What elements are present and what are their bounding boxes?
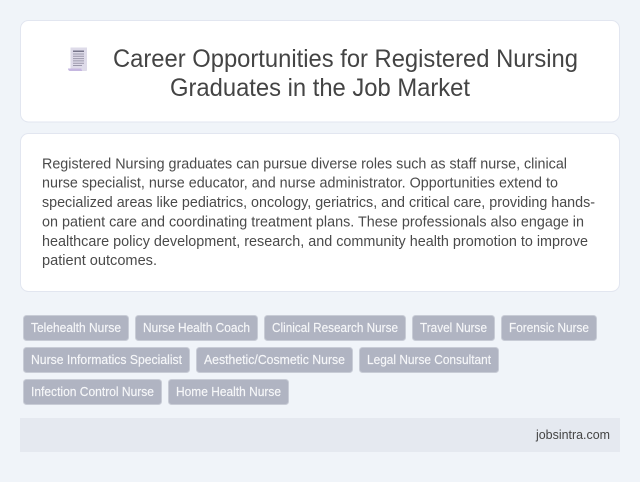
description text: healthcare policy development, research, and community health promotion to improve [42, 233, 588, 250]
tag: Nurse Health Coach: Nurse Health Coach [143, 321, 250, 335]
tag: Home Health Nurse: Home Health Nurse [176, 385, 281, 399]
panel: description [20, 134, 620, 292]
tag: Clinical Research Nurse [264, 316, 406, 340]
description text: specialized areas like pediatrics, oncology, geriatrics, and critical care, providing hands- [42, 194, 595, 211]
tag: Nurse Informatics Specialist [24, 348, 190, 372]
tag: Aesthetic/Cosmetic Nurse [196, 348, 352, 372]
description text: patient outcomes. [42, 252, 157, 269]
tag: Legal Nurse Consultant [360, 348, 498, 372]
tag: Infection Control Nurse: Infection Control Nurse [31, 385, 154, 399]
description text: Registered Nursing graduates can pursue diverse roles such as staff nurse, clinical [42, 156, 567, 172]
title: Graduates in the Job Market [170, 74, 470, 102]
title [113, 45, 578, 102]
footer [20, 418, 620, 452]
tag: Telehealth Nurse: Telehealth Nurse [31, 321, 121, 335]
tag: Clinical Research Nurse: Clinical Research Nurse [272, 321, 398, 335]
tag: Forensic Nurse: Forensic Nurse [509, 321, 589, 335]
tag: Telehealth Nurse [24, 316, 128, 340]
icon: document scroll [68, 48, 87, 71]
tag: Aesthetic/Cosmetic Nurse: Aesthetic/Cosmetic Nurse [204, 353, 345, 367]
panel: title header [20, 20, 620, 122]
description text: on patient care and coordinating treatment plans. These professionals also engage in [42, 214, 584, 230]
title: Career Opportunities for Registered Nursing [113, 45, 578, 73]
description text: nurse specialist, nurse educator, and nurse administrator. Opportunities extend to [42, 174, 558, 192]
tag: Travel Nurse: Travel Nurse [420, 321, 487, 335]
tag: Infection Control Nurse [24, 380, 162, 404]
tag: Nurse Health Coach [136, 316, 258, 340]
tag: Nurse Informatics Specialist: Nurse Informatics Specialist [31, 353, 182, 367]
tag: Home Health Nurse [168, 380, 288, 404]
footer source text: jobsintra.com [535, 428, 610, 442]
tag: Travel Nurse [412, 316, 494, 340]
description text [42, 156, 595, 269]
tag: Legal Nurse Consultant: Legal Nurse Consultant [367, 353, 491, 367]
tag list [24, 316, 596, 404]
tag: Forensic Nurse [502, 316, 596, 340]
